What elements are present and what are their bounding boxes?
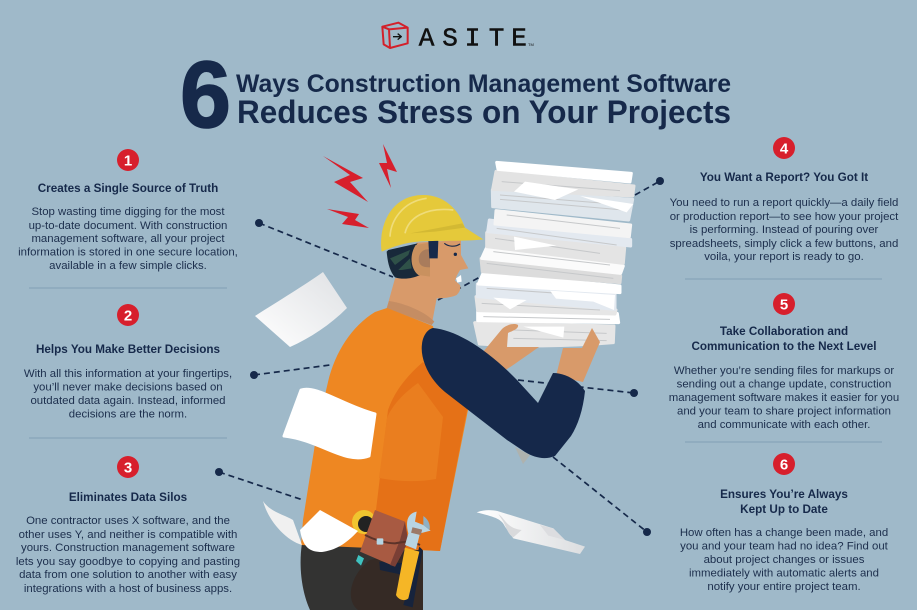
panel: 3 data silos: Eliminates Data Silos [69, 491, 188, 504]
panel: 2 better decisions: outdated data again. Instead, informed [30, 395, 226, 407]
panel: 5 collaboration: Take Collaboration and [720, 325, 848, 338]
paper: top left [255, 272, 347, 347]
teeth [456, 275, 462, 283]
panel: 6 up to date: immediately with automatic alerts and [689, 568, 879, 580]
title: Reduces Stress on Your Projects [237, 94, 731, 130]
panel: 2 better decisions: With all this information at your fingertips, [24, 368, 232, 380]
head details and helmet [381, 195, 483, 283]
badge 4 [773, 137, 795, 159]
panel: 6 up to date: Kept Up to Date [740, 503, 828, 516]
panel: 1 single source of truth: Creates a Single Source of Truth [38, 182, 218, 195]
panel: 2 better decisions [24, 304, 232, 420]
panel: 3 data silos: integrations with a host of business apps. [24, 583, 232, 595]
badge 6 [773, 453, 795, 475]
panel: 3 data silos: One contractor uses X software, and the [26, 515, 230, 527]
wordmark: ASITE [419, 24, 527, 54]
icon: red cube [382, 23, 408, 48]
paper: lower right curling [477, 510, 585, 554]
hair [387, 243, 420, 279]
panel: 1 single source of truth: Stop wasting time digging for the most [31, 206, 225, 218]
paper: mid left waving [284, 389, 375, 458]
badge 6: 6 [780, 456, 788, 474]
panel: 5 collaboration: and your team to share project information [677, 406, 891, 418]
badge 5 [773, 293, 795, 315]
paper corner under elbow [515, 447, 530, 464]
panel: 1 single source of truth [18, 149, 238, 272]
connector lines [215, 177, 664, 536]
trousers [301, 543, 423, 610]
panel: 4 reports: is performing. Instead of pouring over [690, 224, 879, 236]
panel: 6 up to date: Ensures You’re Always [720, 488, 848, 501]
tool belt [356, 510, 431, 607]
panel: 1 single source of truth: management software, all your project [31, 233, 225, 245]
lightning bolts [323, 144, 397, 228]
panel: 1 single source of truth: available in a few simple clicks. [49, 260, 207, 272]
ear [412, 243, 430, 277]
panel: 5 collaboration: Communication to the Next Level [691, 340, 877, 353]
title: Ways Construction Management Software [236, 70, 731, 98]
vest [301, 308, 469, 551]
panel: 6 up to date: notify your entire project team. [707, 581, 861, 593]
panel: 6 up to date: How often has a change been made, and [680, 527, 888, 539]
panel: 2 better decisions: you’ll never make decisions based on [33, 382, 223, 394]
vest pocket ring [352, 510, 376, 534]
panel: 4 reports [670, 137, 899, 263]
head and neck skin [387, 240, 468, 325]
badge 3: 3 [124, 460, 132, 476]
tool shadows [379, 562, 407, 575]
panel: 6 up to date: about project changes or issues [704, 554, 865, 566]
panel: 5 collaboration: management software makes it easier for you [669, 392, 899, 404]
wrench [405, 512, 431, 549]
panel: 2 better decisions: Helps You Make Better Decisions [36, 343, 221, 356]
panel: 6 up to date [680, 453, 889, 593]
badge 3 [117, 456, 139, 478]
logo: Asite: TM [528, 42, 534, 47]
panel: 5 collaboration: sending out a change update, construction [677, 378, 891, 390]
pouch [360, 510, 408, 567]
panel: 5 collaboration [669, 293, 899, 431]
badge 4: 4 [780, 140, 789, 158]
eye [444, 243, 460, 246]
title [180, 42, 731, 148]
badge 1: 1 [124, 152, 132, 170]
panel: 6 up to date: you and your team had no idea? Find out [680, 540, 889, 552]
panel: 3 data silos: other uses Y, and neither is compatible with [19, 529, 237, 541]
badge 2 [117, 304, 139, 326]
panel: 2 better decisions: decisions are the norm. [69, 408, 187, 420]
illustration: stressed worker [255, 162, 634, 610]
panel: 5 collaboration: Whether you’re sending files for markups or [674, 365, 894, 377]
panel: 4 reports: spreadsheets, simply click a few buttons, and [670, 238, 898, 250]
left hand [483, 324, 539, 378]
arm [422, 328, 585, 458]
panel: 1 single source of truth: up-to-date document. With construction [29, 220, 227, 232]
panel: 4 reports: voila, your report is ready to go. [704, 251, 864, 263]
paper: lower left curling [263, 501, 302, 545]
right hand [556, 328, 600, 382]
badge 2: 2 [124, 308, 132, 324]
panel: 3 data silos: lets you say goodbye to copying and pasting [16, 556, 240, 568]
panel: 5 collaboration: and communicate with each other. [698, 419, 870, 431]
panel: 1 single source of truth: information is stored in one secure location, [18, 246, 238, 258]
sideburn [428, 240, 438, 258]
helmet [381, 195, 483, 252]
badge 1 [117, 149, 139, 171]
panel: 4 reports: or production report—to see how your project [670, 211, 899, 223]
panel: 3 data silos: yours. Construction management software [21, 542, 235, 554]
title: 6 [180, 42, 231, 148]
panel: 4 reports: You Want a Report? You Got It [700, 171, 868, 184]
panel: 3 data silos [16, 456, 240, 595]
panel: 3 data silos: data from one solution to another with easy [19, 569, 237, 581]
paper stack [475, 162, 634, 346]
badge 5: 5 [780, 296, 788, 314]
logo: Asite [382, 23, 534, 54]
panel: 4 reports: You need to run a report quickly—a daily field [670, 197, 898, 209]
